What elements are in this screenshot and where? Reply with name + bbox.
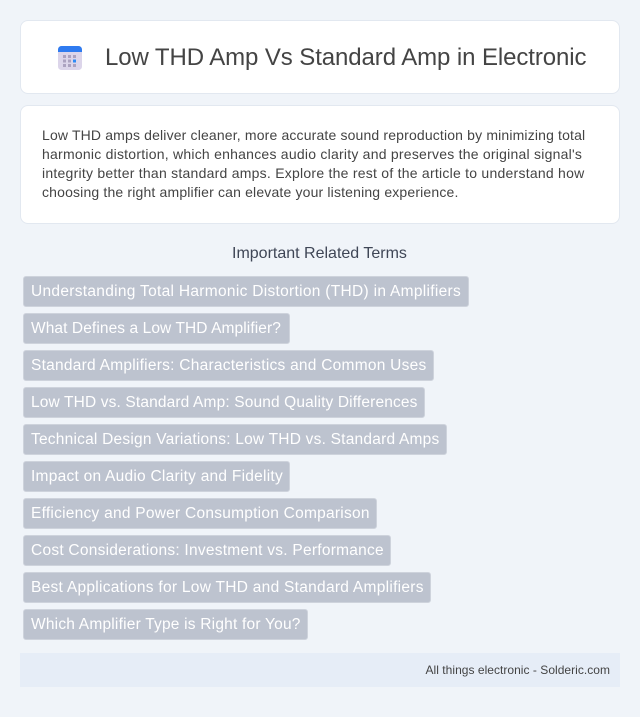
tag: Standard Amplifiers: Characteristics and Common Uses: [31, 357, 426, 374]
tag: Low THD vs. Standard Amp: Sound Quality Differences: [31, 394, 418, 411]
tag: Which Amplifier Type is Right for You?: [31, 616, 301, 633]
tag: Understanding Total Harmonic Distortion (THD) in Amplifiers: [31, 283, 461, 300]
footer bar: [20, 653, 620, 687]
intro text: choosing the right amplifier can elevate your listening experience.: [42, 184, 459, 200]
header card: [20, 20, 620, 94]
intro card: [20, 105, 620, 224]
intro text: integrity better than standard amps. Explore the rest of the article to understand how: [42, 165, 584, 181]
tag: What Defines a Low THD Amplifier?: [31, 320, 281, 337]
title: Low THD Amp Vs Standard Amp in Electronic: [105, 44, 586, 71]
tag: Best Applications for Low THD and Standard Amplifiers: [31, 579, 424, 596]
tag: Efficiency and Power Consumption Comparison: [31, 505, 370, 522]
tag: [23, 572, 431, 603]
tag: [23, 498, 377, 529]
tag: [23, 424, 447, 455]
intro text: [42, 127, 585, 200]
footer credit: All things electronic - Solderic.com: [426, 663, 610, 677]
tag: [23, 276, 469, 307]
tag: Impact on Audio Clarity and Fidelity: [31, 468, 283, 485]
tag: Technical Design Variations: Low THD vs. Standard Amps: [31, 431, 439, 448]
tag: [23, 313, 290, 344]
tag: [23, 350, 434, 381]
tag: [23, 461, 290, 492]
tag: [23, 609, 308, 640]
icon: calendar: [58, 46, 82, 70]
intro text: Low THD amps deliver cleaner, more accurate sound reproduction by minimizing total: [42, 127, 585, 143]
tag list: [23, 276, 469, 640]
intro text: harmonic distortion, which enhances audio clarity and preserves the original signal's: [42, 146, 582, 162]
tag: Cost Considerations: Investment vs. Performance: [31, 542, 384, 559]
heading: important related terms: Important Related Terms: [232, 245, 407, 262]
tag: [23, 387, 425, 418]
tag: [23, 535, 391, 566]
